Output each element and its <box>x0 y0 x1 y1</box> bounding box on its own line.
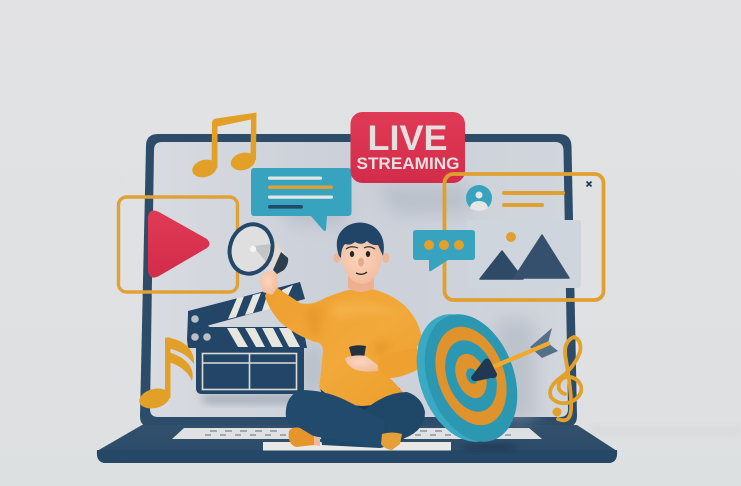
phone <box>349 345 366 358</box>
megaphone body <box>258 234 286 272</box>
eyes and mouth <box>346 247 375 274</box>
right leg <box>320 392 425 448</box>
trackpad <box>263 442 451 450</box>
hand holding megaphone <box>260 271 278 295</box>
chat bubble: dots <box>413 230 475 271</box>
clapper arm <box>188 282 305 332</box>
sweater body and raised arm <box>265 287 422 406</box>
sweater folds <box>305 302 400 356</box>
target shadow <box>462 443 518 451</box>
arrow <box>471 328 558 381</box>
target rings <box>408 301 534 455</box>
target side <box>400 301 526 455</box>
laptop base <box>97 425 617 463</box>
speech bubble: text lines <box>251 168 352 231</box>
hand holding phone <box>345 355 379 372</box>
megaphone grip <box>273 252 288 274</box>
icon: treble clef <box>550 337 581 420</box>
megaphone <box>223 219 288 279</box>
window text lines <box>502 191 565 207</box>
window outline <box>444 174 604 300</box>
clapper shadow <box>200 394 310 404</box>
badge text: STREAMING: STREAMING <box>356 154 460 173</box>
forearm <box>378 347 417 378</box>
icon: play triangle <box>148 210 210 278</box>
clapper body <box>196 348 304 394</box>
keyboard <box>172 428 542 439</box>
target <box>400 301 558 455</box>
ears <box>334 253 390 263</box>
face <box>340 238 382 284</box>
icon: close <box>586 182 592 186</box>
character <box>260 222 425 450</box>
media window <box>444 174 604 300</box>
left shoe <box>289 427 315 447</box>
clapperboard <box>187 282 310 404</box>
laptop <box>97 134 617 463</box>
panel: play button outline <box>118 197 238 292</box>
badge text: LIVE: LIVE <box>368 119 448 158</box>
left leg <box>286 390 385 448</box>
soft shadows on screen <box>275 184 535 420</box>
megaphone bell <box>223 219 279 279</box>
icon: avatar <box>466 185 492 211</box>
laptop screen frame <box>140 134 577 427</box>
neck <box>348 272 374 292</box>
window image panel <box>467 220 581 288</box>
icon: mountain image <box>480 232 569 279</box>
clapper hinge band <box>187 314 307 348</box>
live streaming badge <box>350 112 465 183</box>
icon: music note top <box>190 112 257 180</box>
icon: music note left <box>137 338 194 411</box>
crotch shadow <box>320 388 400 420</box>
hair <box>337 222 384 258</box>
right shoe <box>381 432 402 450</box>
ankle <box>314 436 320 446</box>
